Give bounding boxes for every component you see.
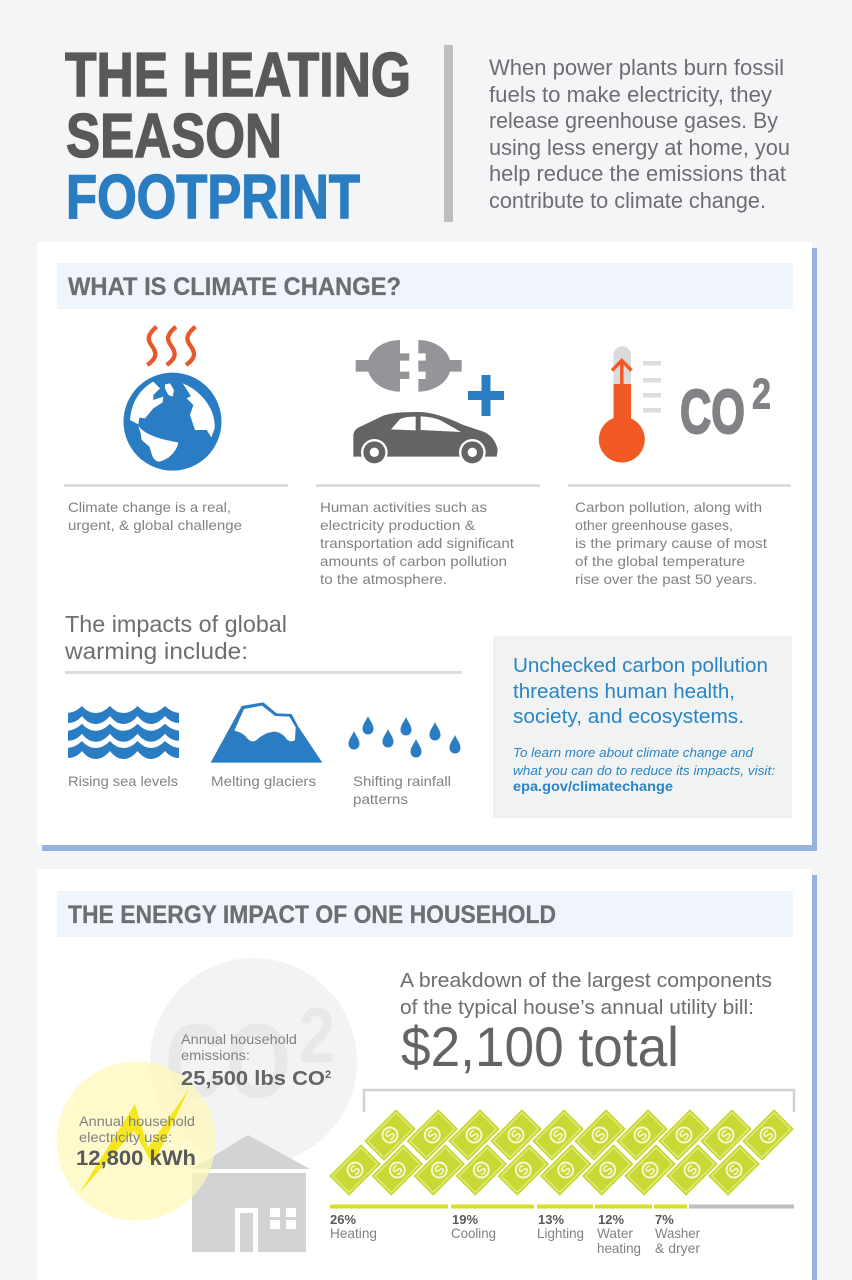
icon: rainfall drops [348, 716, 460, 758]
text: column 1: Climate change is a real, [68, 499, 231, 515]
callout: unchecked carbon pollution: Unchecked carbon pollution [513, 655, 768, 677]
text: column 1 [68, 499, 242, 533]
emissions circle: 2 [299, 991, 335, 1079]
emissions circle: CO [165, 1003, 291, 1120]
emissions stat: 25,500 lbs CO [181, 1068, 325, 1090]
emissions stat: Annual household [181, 1031, 297, 1047]
breakdown heading [400, 969, 772, 1019]
label: lighting [537, 1212, 584, 1241]
callout: unchecked carbon pollution: what you can do to reduce its impacts, visit: [513, 763, 775, 778]
text: column 3: of the global temperature [575, 553, 745, 569]
heading: impacts of global warming: The impacts of global [65, 611, 287, 637]
electricity stat: electricity use: [79, 1129, 172, 1145]
label: cooling [451, 1212, 496, 1241]
icon: thermometer and CO2 [599, 346, 771, 462]
emissions circle [150, 958, 357, 1165]
dollar bills [329, 1109, 794, 1196]
title: FOOTPRINT [66, 163, 360, 232]
icon: melting glacier [211, 702, 322, 763]
label: washer and dryer: 7% [655, 1212, 674, 1227]
heading: what is climate change: WHAT IS CLIMATE CHANGE? [68, 273, 401, 301]
icon: heated globe [123, 327, 221, 471]
heading: energy impact [57, 891, 793, 937]
electricity stat: Annual household [79, 1113, 195, 1129]
impact labels: Rising sea levels [68, 773, 178, 789]
label: washer and dryer: Washer [655, 1225, 700, 1241]
icon: thermometer and CO2: 2 [752, 370, 771, 418]
emissions stat [181, 1031, 331, 1090]
intro text [489, 55, 790, 213]
house icon [192, 1135, 310, 1252]
icon: thermometer and CO2: CO [680, 378, 745, 447]
label: heating: Heating [330, 1225, 377, 1241]
emissions stat: emissions: [181, 1047, 250, 1063]
intro text: help reduce the emissions that [489, 161, 786, 186]
globe [123, 373, 221, 471]
label: water heating: heating [597, 1240, 641, 1256]
label: lighting: Lighting [537, 1225, 584, 1241]
text: column 2: electricity production & [320, 517, 476, 533]
callout: unchecked carbon pollution: To learn more about climate change and [513, 745, 754, 760]
intro text: When power plants burn fossil [489, 55, 784, 80]
text: column 2 [320, 499, 514, 587]
text: column 3: Carbon pollution, along with [575, 499, 762, 515]
text: column 2: transportation add significant [320, 535, 514, 551]
text: column 2: amounts of carbon pollution [320, 553, 507, 569]
callout: unchecked carbon pollution: epa.gov/climatechange [513, 778, 673, 794]
text: column 2: to the atmosphere. [320, 571, 447, 587]
heading: impacts of global warming: warming include: [64, 638, 248, 664]
electricity circle with bolt [56, 1062, 216, 1220]
plug [356, 340, 462, 392]
callout: unchecked carbon pollution: society, and ecosystems. [513, 706, 744, 728]
impact labels: Melting glaciers [211, 773, 316, 789]
intro text: contribute to climate change. [489, 188, 766, 213]
car [353, 412, 498, 466]
heat waves [147, 327, 195, 365]
label: heating [330, 1212, 377, 1241]
label: cooling: Cooling [451, 1225, 496, 1241]
title [65, 41, 411, 232]
impact labels [68, 773, 451, 807]
emissions stat: 2 [325, 1069, 331, 1081]
callout: unchecked carbon pollution [493, 636, 792, 818]
breakdown heading: A breakdown of the largest components [400, 969, 772, 992]
text: column 3: is the primary cause of most [575, 535, 767, 551]
title: SEASON [66, 102, 282, 171]
label: cooling: 19% [452, 1212, 478, 1227]
title: THE HEATING [65, 41, 411, 110]
text: column 2: Human activities such as [320, 499, 487, 515]
electricity stat [76, 1113, 196, 1170]
electricity stat: 12,800 kWh [76, 1147, 196, 1170]
text: column 1: urgent, & global challenge [68, 517, 242, 533]
callout: unchecked carbon pollution: threatens human health, [513, 681, 735, 703]
text: column 3: rise over the past 50 years. [575, 571, 757, 587]
impact labels: Shifting rainfall [353, 773, 451, 789]
heading: impacts of global warming [64, 611, 287, 664]
text: column 3: other greenhouse gases, [575, 517, 733, 533]
label: lighting: 13% [538, 1212, 564, 1227]
label: heating: 26% [330, 1212, 356, 1227]
intro text: release greenhouse gases. By [489, 108, 778, 133]
plus sign [468, 375, 504, 416]
bracket [364, 1090, 794, 1112]
label: water heating: 12% [598, 1212, 624, 1227]
column rules [64, 484, 791, 487]
label: washer and dryer [655, 1212, 700, 1256]
percentage bar [330, 1204, 794, 1208]
icon: rising sea waves [68, 706, 179, 759]
panel: what is climate change [37, 242, 817, 851]
label: water heating: Water [597, 1225, 633, 1241]
title divider [444, 45, 453, 222]
breakdown heading: of the typical house’s annual utility bill: [400, 996, 754, 1019]
label: water heating [597, 1212, 641, 1256]
heading: energy impact: THE ENERGY IMPACT OF ONE HOUSEHOLD [68, 901, 556, 929]
intro text: using less energy at home, you [489, 135, 790, 160]
impact labels: patterns [353, 791, 408, 807]
text: column 3 [575, 499, 767, 587]
heading: what is climate change [57, 263, 793, 309]
panel: energy impact of one household [37, 869, 817, 1280]
icon: plug and car [353, 340, 504, 466]
label: washer and dryer: & dryer [655, 1240, 700, 1256]
total amount: $2,100 total [401, 1015, 679, 1078]
intro text: fuels to make electricity, they [489, 82, 772, 107]
